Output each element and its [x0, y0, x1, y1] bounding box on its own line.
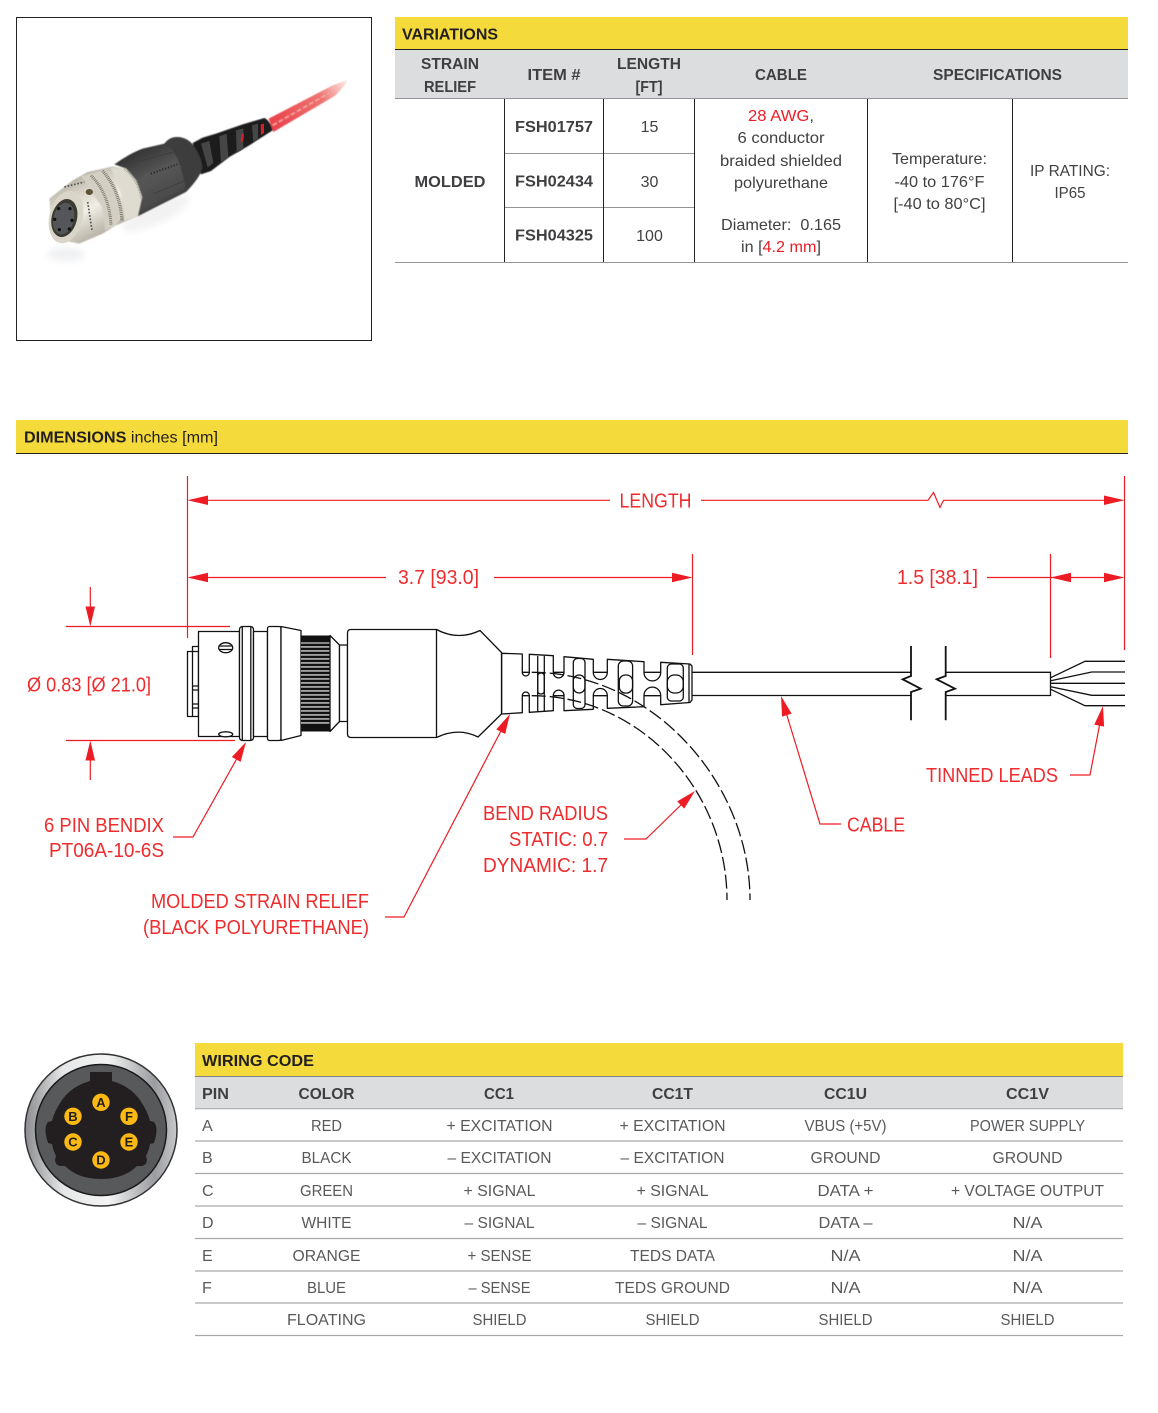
header row	[202, 1086, 1049, 1103]
row F: N/A	[830, 1280, 861, 1297]
table header row: LENGTH	[617, 56, 681, 73]
length dimension: LENGTH	[620, 490, 692, 512]
row B: – EXCITATION	[620, 1150, 724, 1167]
bend radius dashed cable path	[532, 672, 750, 900]
row C: + VOLTAGE OUTPUT	[951, 1183, 1104, 1200]
row C: GREEN	[300, 1183, 353, 1200]
3.7 dimension	[188, 554, 692, 655]
row B: B	[202, 1150, 213, 1167]
row C: + SIGNAL	[636, 1183, 709, 1200]
row B: – EXCITATION	[448, 1150, 552, 1167]
callout: tinned leads: TINNED LEADS	[926, 764, 1058, 787]
table body: 28 AWG,	[748, 108, 814, 125]
product photo panel	[16, 18, 372, 340]
table body: 6 conductor	[738, 130, 825, 147]
dimensions heading: DIMENSIONS inches [mm]	[24, 430, 218, 446]
row F: F	[202, 1280, 212, 1297]
row D: – SIGNAL	[464, 1215, 535, 1232]
photo: connector with red cable	[43, 80, 348, 262]
row floating: SHIELD	[646, 1312, 700, 1329]
callout: molded strain relief: MOLDED STRAIN RELIEF	[151, 890, 369, 913]
dimensions heading	[16, 420, 1128, 454]
pin letters: E	[125, 1135, 134, 1150]
row C	[202, 1183, 1104, 1200]
table header row: SPECIFICATIONS	[933, 67, 1062, 84]
row E: TEDS DATA	[630, 1248, 715, 1265]
row B: BLACK	[302, 1150, 352, 1167]
row A: A	[202, 1118, 213, 1135]
cable with break	[692, 646, 1050, 720]
row C: DATA +	[818, 1183, 874, 1200]
callout: cable	[776, 695, 905, 836]
pin letters: D	[96, 1153, 106, 1168]
callout: tinned leads	[926, 705, 1108, 787]
table header row	[421, 56, 1062, 96]
connector shell	[188, 626, 301, 740]
row F: N/A	[1012, 1280, 1043, 1297]
knurled coupling ring	[301, 636, 348, 732]
callout: 6 pin Bendix: PT06A-10-6S	[49, 839, 164, 862]
pin letters: F	[125, 1109, 133, 1124]
wiring code table	[195, 1043, 1123, 1336]
wiring code heading: WIRING CODE	[202, 1053, 314, 1070]
row E	[202, 1248, 1043, 1265]
table body: polyurethane	[734, 175, 828, 192]
wiring code heading	[195, 1043, 1123, 1076]
row A: VBUS (+5V)	[804, 1118, 886, 1135]
callout: molded strain relief	[143, 712, 514, 939]
row D: DATA –	[818, 1215, 873, 1232]
row D: WHITE	[302, 1215, 352, 1232]
row F: BLUE	[307, 1280, 346, 1297]
table header row: RELIEF	[424, 79, 476, 96]
row E: + SENSE	[468, 1248, 532, 1265]
row E: E	[202, 1248, 213, 1265]
row D	[202, 1215, 1043, 1232]
overmold body	[348, 630, 502, 738]
header row: PIN	[202, 1086, 229, 1103]
table body: MOLDED	[414, 174, 486, 191]
table header row: CABLE	[755, 67, 807, 84]
callout: molded strain relief: (BLACK POLYURETHANE)	[143, 916, 369, 939]
table body: -40 to 176°F	[894, 174, 985, 191]
table body: 30	[641, 174, 658, 191]
header row: CC1	[484, 1086, 514, 1103]
pin letters: C	[68, 1135, 78, 1150]
header row: COLOR	[298, 1086, 355, 1103]
row B: GROUND	[810, 1150, 880, 1167]
row F: TEDS GROUND	[615, 1280, 730, 1297]
row floating: FLOATING	[287, 1312, 366, 1329]
row floating: SHIELD	[818, 1312, 872, 1329]
row E: N/A	[1012, 1248, 1043, 1265]
row E: ORANGE	[292, 1248, 360, 1265]
table body: FSH02434	[515, 174, 593, 190]
row C: + SIGNAL	[464, 1183, 536, 1200]
pin letters	[68, 1095, 134, 1168]
variations heading	[395, 17, 1128, 49]
row A: RED	[311, 1118, 342, 1135]
callout: 6 pin Bendix: 6 PIN BENDIX	[44, 814, 164, 837]
row B: GROUND	[992, 1150, 1062, 1167]
callout: bend radius	[483, 787, 698, 877]
3.7 dimension: 3.7 [93.0]	[398, 566, 479, 589]
diameter dimension	[27, 587, 235, 780]
pinout diagram	[25, 1054, 177, 1206]
1.5 dimension: 1.5 [38.1]	[897, 566, 978, 589]
row D: – SIGNAL	[638, 1215, 708, 1232]
diameter dimension: Ø 0.83 [Ø 21.0]	[27, 674, 151, 696]
table header row: [FT]	[636, 79, 662, 96]
pin letters: A	[96, 1095, 106, 1110]
row C: C	[202, 1183, 214, 1200]
row F: – SENSE	[468, 1280, 530, 1297]
header row: CC1T	[652, 1086, 693, 1103]
variations table	[395, 17, 1128, 262]
row A: + EXCITATION	[620, 1118, 726, 1135]
table body: Diameter: 0.165	[721, 217, 841, 234]
table body: braided shielded	[720, 153, 842, 170]
pins	[64, 1094, 138, 1169]
connector technical drawing	[188, 626, 1125, 900]
table body: in [4.2 mm]	[741, 239, 821, 256]
table header row: ITEM #	[528, 67, 581, 84]
row F	[202, 1280, 1043, 1297]
callout: bend radius: STATIC: 0.7	[509, 828, 608, 851]
row D: N/A	[1012, 1215, 1043, 1232]
callout: bend radius: DYNAMIC: 1.7	[483, 854, 608, 877]
header row: CC1V	[1006, 1086, 1049, 1103]
row E: N/A	[830, 1248, 861, 1265]
tinned leads	[1051, 661, 1125, 706]
table body: 100	[636, 228, 663, 245]
row floating: SHIELD	[1000, 1312, 1054, 1329]
table body: [-40 to 80°C]	[894, 196, 986, 213]
row floating: SHIELD	[472, 1312, 526, 1329]
callout: 6 pin Bendix	[44, 740, 250, 862]
dimension lines and callouts	[27, 476, 1124, 939]
table body	[414, 108, 1110, 256]
row B	[202, 1150, 1062, 1167]
length dimension	[188, 476, 1124, 650]
variations heading: VARIATIONS	[402, 26, 498, 44]
pin letters: B	[68, 1109, 78, 1124]
1.5 dimension	[897, 554, 1124, 658]
table body: IP RATING:	[1030, 163, 1110, 180]
table body: FSH01757	[515, 119, 593, 136]
table body: 15	[641, 119, 658, 136]
strain relief	[502, 653, 692, 714]
callout: cable: CABLE	[847, 814, 905, 836]
table body: FSH04325	[515, 228, 593, 244]
row A: POWER SUPPLY	[970, 1118, 1085, 1135]
header row: CC1U	[824, 1086, 867, 1103]
row A	[202, 1118, 1085, 1135]
row floating	[287, 1312, 1054, 1329]
row A: + EXCITATION	[446, 1118, 552, 1135]
row D: D	[202, 1215, 214, 1232]
table header row: STRAIN	[421, 56, 479, 73]
table body: Temperature:	[892, 151, 987, 168]
callout: bend radius: BEND RADIUS	[483, 802, 608, 825]
table body: IP65	[1054, 185, 1086, 202]
